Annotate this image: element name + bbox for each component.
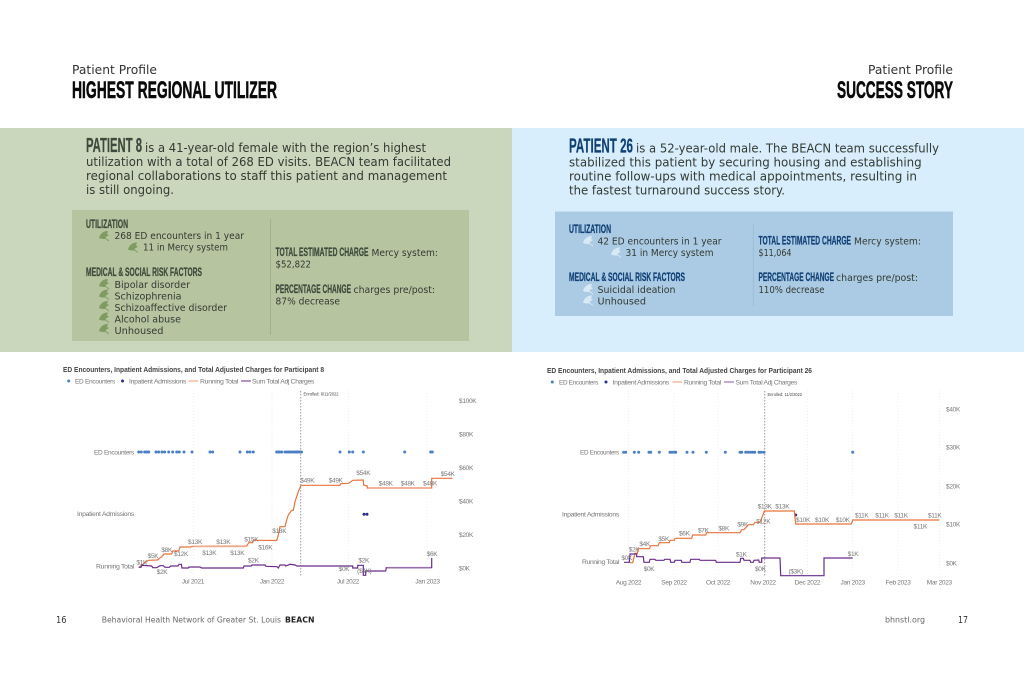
x axis labels: Jan 2023	[841, 579, 866, 586]
inpatient admission dots	[364, 513, 367, 516]
patient 26 description: is a 52-year-old male. The BEACN team successfully	[636, 142, 939, 156]
data labels: $5K	[148, 553, 159, 560]
x axis labels: Jul 2022	[337, 579, 360, 586]
data labels: $1K	[848, 551, 859, 558]
patient 8 description: is still ongoing.	[86, 183, 174, 197]
utilization list: 31 in Mercy system	[626, 248, 714, 259]
data labels: $12K	[174, 551, 189, 558]
y axis labels: $20K	[459, 532, 474, 539]
data labels: $48K	[401, 480, 416, 487]
data labels: $6K	[679, 531, 691, 538]
left footer: 16	[56, 615, 66, 626]
left page heading	[72, 63, 277, 104]
data labels: $10K	[796, 517, 811, 524]
data labels: $1K	[736, 551, 748, 558]
utilization list	[569, 222, 722, 259]
panel: patient 8 profile	[0, 128, 512, 352]
data labels: $2K	[248, 558, 260, 565]
data labels: $13K	[758, 504, 773, 511]
risk factors list: Unhoused	[598, 296, 646, 308]
data labels: $54K	[356, 470, 371, 477]
chart legend	[551, 379, 798, 386]
patient 26 description	[569, 136, 939, 198]
percentage change: 87% decrease	[276, 296, 340, 308]
data labels: $2K	[358, 558, 370, 565]
ED encounter dots	[624, 451, 853, 454]
total estimated charge	[276, 245, 438, 271]
total estimated charge: Mercy system:	[372, 248, 438, 259]
percentage change: charges pre/post:	[836, 273, 918, 284]
risk factors list: MEDICAL & SOCIAL RISK FACTORS	[86, 265, 202, 279]
x axis labels: Jan 2023	[415, 579, 440, 586]
data labels: $13K	[775, 504, 790, 511]
patient 8 details box	[72, 210, 469, 341]
total estimated charge: Mercy system:	[854, 236, 921, 248]
data labels: $13K	[202, 550, 217, 557]
total estimated charge	[758, 234, 921, 259]
y axis labels	[946, 406, 961, 567]
x axis labels	[182, 579, 440, 586]
panel: patient 26 profile	[512, 128, 1024, 352]
data labels: $15K	[244, 536, 259, 543]
data labels: $0K	[339, 566, 350, 573]
row labels: Inpatient Admissions	[77, 511, 135, 518]
y axis labels: $80K	[459, 431, 474, 438]
icon: leaf bullet	[99, 290, 109, 300]
left footer	[56, 615, 314, 626]
risk factors list: Schizoaffective disorder	[114, 303, 227, 314]
inpatient admission dot	[794, 514, 797, 516]
patient 8 description	[86, 135, 451, 197]
chart legend: Inpatient Admissions	[129, 378, 187, 385]
y axis labels: $100K	[459, 398, 477, 405]
risk factors list: Alcohol abuse	[114, 314, 181, 326]
icon: leaf bullet	[611, 248, 621, 258]
utilization list: 268 ED encounters in 1 year	[114, 231, 244, 242]
data labels: $1K	[136, 559, 148, 566]
data labels: $4K	[639, 541, 651, 548]
patient 26 details box	[555, 212, 953, 316]
chart legend: Inpatient Admissions	[612, 379, 670, 386]
left footer: Behavioral Health Network of Greater St. Louis	[102, 616, 281, 624]
percentage change	[758, 270, 918, 296]
chart legend: Running Total	[684, 379, 722, 386]
icon: leaf bullet	[583, 284, 593, 294]
data labels: $54K	[441, 471, 456, 478]
x axis labels: Oct 2022	[706, 579, 731, 586]
left page heading: Patient Profile	[72, 63, 157, 77]
icon: leaf bullet	[99, 279, 109, 289]
data labels: $18K	[272, 528, 287, 535]
row labels: Running Total	[582, 559, 620, 566]
patient 8 description: regional collaborations to staff this patient and management	[86, 169, 447, 183]
risk factors list: Schizophrenia	[114, 292, 182, 302]
y axis labels: $40K	[946, 406, 961, 413]
data labels: $49K	[300, 478, 315, 485]
total estimated charge: $11,064	[758, 248, 792, 259]
y axis labels: $10K	[946, 522, 961, 529]
data labels: $0K	[621, 555, 633, 562]
icon: leaf bullet	[128, 242, 138, 252]
percentage change: PERCENTAGE CHANGE	[758, 270, 834, 284]
icon: leaf bullet	[99, 301, 109, 311]
chart legend: Sum Total Adj Charges	[252, 378, 315, 385]
data labels: $13K	[188, 539, 203, 546]
ED encounter dots	[139, 450, 432, 454]
utilization list: 42 ED encounters in 1 year	[598, 236, 722, 248]
chart legend	[67, 378, 315, 385]
data labels: $11K	[855, 513, 869, 520]
left footer: BEACN	[285, 616, 314, 624]
y axis labels: $0K	[946, 560, 958, 567]
data labels: $11K	[894, 513, 909, 520]
percentage change: 110% decrease	[758, 285, 825, 296]
data labels	[136, 470, 456, 576]
y axis labels: $40K	[459, 498, 474, 505]
data labels: $10K	[815, 517, 830, 524]
data labels: $48K	[379, 480, 394, 487]
chart legend: Sum Total Adj Charges	[736, 379, 798, 386]
data labels: $6K	[427, 551, 438, 558]
enrollment marker: Enrolled: 11/2/2022	[768, 392, 802, 398]
x axis labels: Jan 2022	[260, 579, 285, 586]
chart legend: ED Encounters	[75, 378, 116, 385]
left page heading: HIGHEST REGIONAL UTILIZER	[72, 77, 277, 104]
data labels: $0K	[644, 566, 655, 573]
icon: leaf bullet	[583, 236, 593, 246]
utilization list: UTILIZATION	[86, 217, 128, 231]
chart legend: Running Total	[200, 378, 239, 385]
data labels: $2K	[157, 569, 168, 576]
data labels: $5K	[658, 536, 670, 543]
x axis labels: Nov 2022	[750, 579, 776, 586]
data labels: $8K	[718, 526, 730, 533]
y axis labels: $20K	[946, 483, 961, 490]
running total line	[630, 511, 939, 563]
row labels	[562, 449, 620, 566]
patient 8 description: utilization with a total of 268 ED visits. BEACN team facilitated	[86, 155, 451, 169]
chart: participant 8	[63, 365, 477, 586]
adjusted charges line	[139, 558, 432, 575]
patient 26 description: stabilized this patient by securing housing and establishing	[569, 156, 922, 170]
x axis labels: Aug 2022	[616, 579, 642, 586]
x axis labels: Dec 2022	[795, 579, 821, 586]
data labels: $49K	[329, 478, 344, 485]
adjusted charges line	[624, 554, 853, 576]
chart title: ED Encounters, Inpatient Admissions, and Total Adjusted Charges for Participant 26	[547, 366, 812, 375]
utilization list: 11 in Mercy system	[143, 242, 228, 254]
utilization list	[86, 217, 244, 254]
data labels: $9K	[737, 522, 749, 529]
running total line	[139, 478, 452, 567]
risk factors list	[86, 265, 227, 337]
icon: leaf bullet	[99, 231, 109, 241]
enrollment marker: Enrolled: 6/11/2022	[304, 392, 339, 398]
data labels: $13K	[230, 550, 245, 557]
y axis labels: $30K	[946, 445, 961, 452]
x axis labels	[616, 579, 953, 586]
patient 26 description: PATIENT 26	[569, 136, 633, 158]
data labels: $10K	[836, 517, 851, 524]
patient 8 description: PATIENT 8	[86, 135, 142, 157]
row labels: ED Encounters	[580, 449, 620, 456]
total estimated charge: TOTAL ESTIMATED CHARGE	[758, 234, 851, 248]
risk factors list: Bipolar disorder	[114, 280, 190, 291]
row labels: Running Total	[96, 563, 135, 570]
row labels: Inpatient Admissions	[562, 511, 620, 518]
right footer	[885, 615, 968, 626]
right page heading: Patient Profile	[868, 63, 953, 77]
percentage change: PERCENTAGE CHANGE	[276, 282, 351, 296]
data labels: $11K	[928, 513, 942, 520]
percentage change: charges pre/post:	[354, 285, 435, 296]
utilization list: UTILIZATION	[569, 222, 611, 236]
data labels: $13K	[216, 539, 231, 546]
risk factors list: Suicidal ideation	[598, 285, 676, 296]
icon: leaf bullet	[99, 312, 109, 322]
patient 26 description: the fastest turnaround success story.	[569, 184, 785, 198]
y axis labels: $0K	[459, 565, 471, 572]
row labels	[77, 449, 135, 570]
data labels: $11K	[914, 524, 928, 531]
right footer: bhnstl.org	[885, 616, 925, 624]
data labels: ($4K)	[357, 568, 372, 575]
risk factors list: MEDICAL & SOCIAL RISK FACTORS	[569, 270, 685, 284]
icon: leaf bullet	[99, 324, 109, 334]
data labels: $16K	[258, 544, 273, 551]
total estimated charge: TOTAL ESTIMATED CHARGE	[276, 245, 368, 259]
x axis labels: Jul 2021	[182, 579, 205, 586]
data labels: $0K	[755, 566, 767, 573]
x axis labels: Sep 2022	[661, 579, 687, 586]
data labels: $11K	[875, 513, 890, 520]
patient 26 description: routine follow-ups with medical appointments, resulting in	[569, 170, 917, 184]
data labels: $7K	[698, 528, 710, 535]
y axis labels	[459, 398, 477, 572]
risk factors list: Unhoused	[114, 326, 164, 337]
y axis labels: $60K	[459, 465, 474, 472]
data labels: $8K	[161, 547, 173, 554]
x axis labels: Feb 2023	[885, 579, 911, 586]
data labels	[621, 504, 942, 575]
total estimated charge: $52,822	[276, 260, 311, 271]
patient 8 description: is a 41-year-old female with the region’s highest	[145, 141, 426, 155]
icon: leaf bullet	[583, 296, 593, 306]
x axis labels: Mar 2023	[927, 579, 953, 586]
data labels: ($3K)	[788, 568, 803, 575]
data labels: $2K	[629, 547, 640, 554]
chart: participant 26	[547, 366, 961, 586]
right page heading	[837, 63, 953, 104]
data labels: $12K	[756, 519, 771, 526]
data labels: $48K	[423, 480, 438, 487]
right footer: 17	[958, 615, 968, 626]
chart legend: ED Encounters	[559, 379, 599, 386]
row labels: ED Encounters	[94, 449, 135, 456]
risk factors list	[569, 270, 685, 308]
percentage change	[276, 282, 435, 308]
chart title: ED Encounters, Inpatient Admissions, and Total Adjusted Charges for Participant 8	[63, 365, 324, 374]
